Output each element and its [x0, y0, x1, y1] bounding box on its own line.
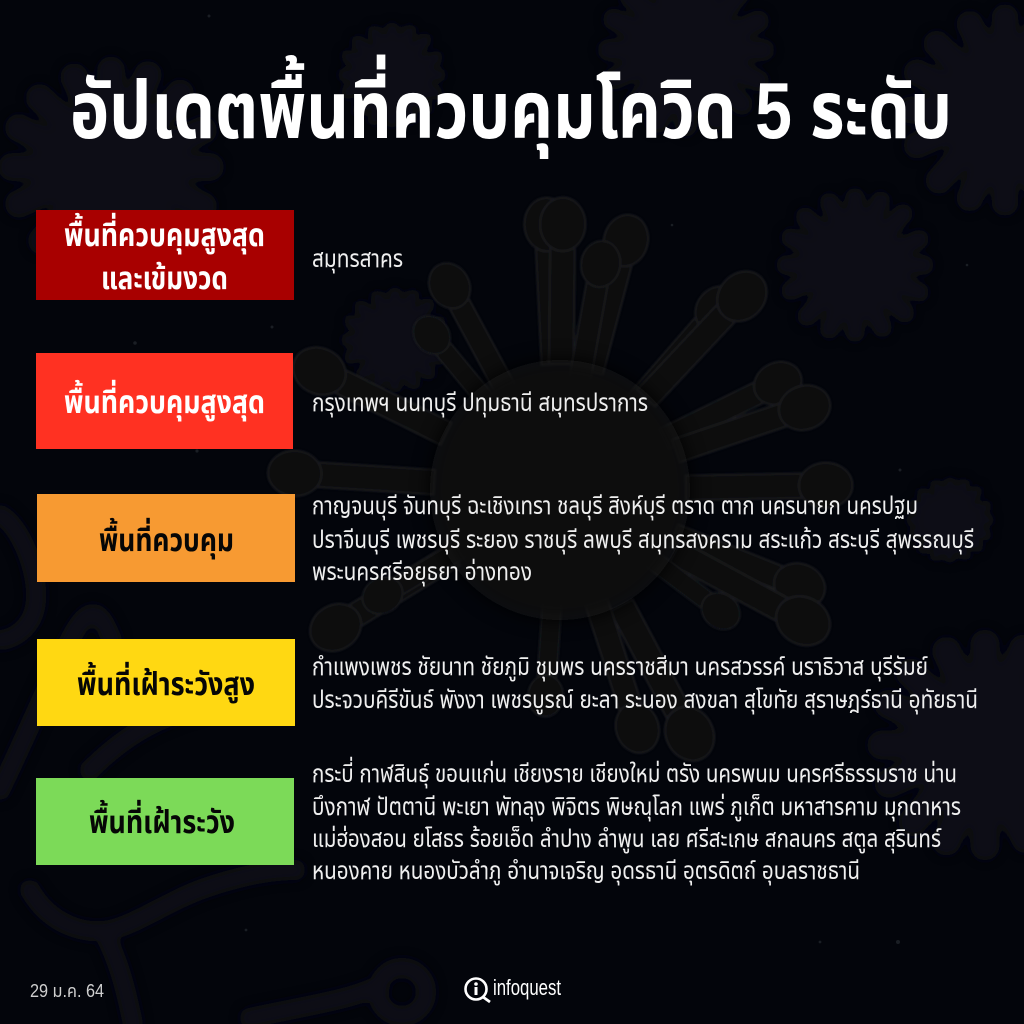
icon: magnifier with i — [466, 978, 490, 1002]
level 1: box: พื้นที่ควบคุมสูงสุด — [64, 212, 265, 254]
level 1: provinces: สมุทรสาคร — [312, 245, 403, 274]
level 5: box — [36, 778, 294, 865]
level 3: box: พื้นที่ควบคุม — [99, 517, 234, 559]
background: main virus outline — [267, 197, 853, 769]
background: blurred virus chain, lower left — [0, 515, 426, 1024]
level 1: box: และเข้มงวด — [101, 260, 228, 296]
level 1: box — [36, 210, 294, 300]
background: dust specks — [133, 14, 968, 944]
level 5: provinces — [312, 756, 961, 886]
level 2: box: พื้นที่ควบคุมสูงสุด — [64, 379, 265, 421]
date: 29 ม.ค. 64 — [30, 981, 104, 1001]
logo: infoquest — [466, 975, 561, 1002]
level 5: provinces: หนองคาย หนองบัวลำภู อำนาจเจริญ อุดรธานี อุตรดิตถ์ อุบลราชธานี — [312, 857, 860, 886]
logo: infoquest: infoquest — [493, 975, 561, 1000]
level 4: box — [37, 639, 295, 726]
level 4: provinces — [312, 653, 978, 715]
level 3: provinces — [312, 492, 974, 587]
background: main virus body — [430, 360, 690, 620]
level 3: provinces: พระนครศรีอยุธยา อ่างทอง — [312, 558, 532, 587]
level 4: box: พื้นที่เฝ้าระวังสูง — [77, 661, 255, 703]
level 2: provinces: กรุงเทพฯ นนทบุรี ปทุมธานี สมุทรปราการ — [312, 389, 648, 418]
level 3: box — [37, 494, 295, 582]
level 2: box — [36, 353, 293, 449]
level 5: box: พื้นที่เฝ้าระวัง — [89, 799, 235, 840]
virus spikes — [267, 197, 853, 769]
